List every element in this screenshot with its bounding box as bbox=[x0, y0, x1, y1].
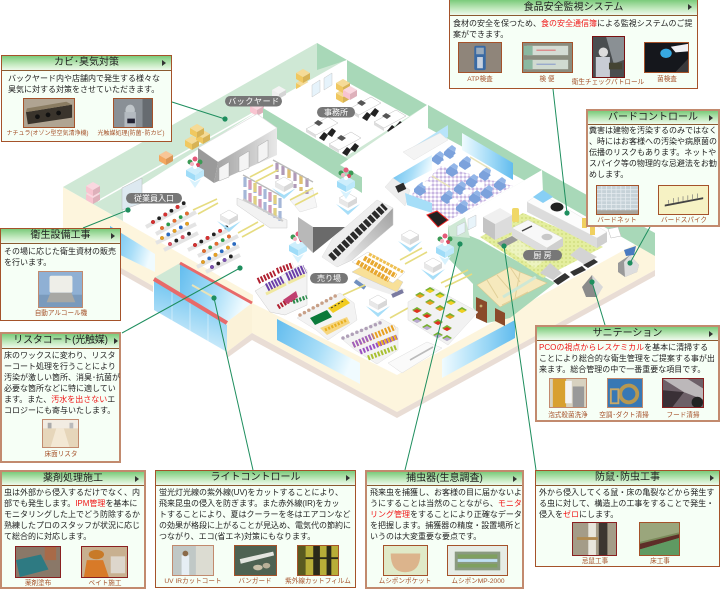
text block: ます。また、汚水を出さないエ bbox=[4, 395, 115, 404]
heading: 衛生設備工事 bbox=[30, 230, 90, 241]
room labels: 従業員入口 bbox=[134, 193, 174, 203]
room labels: 厨 房 bbox=[533, 251, 552, 260]
caption: バンガード bbox=[238, 578, 272, 585]
heading bbox=[156, 471, 355, 486]
text block bbox=[370, 488, 522, 541]
photo: stool test kits bbox=[522, 42, 573, 73]
heading bbox=[1, 229, 120, 244]
heading bbox=[2, 334, 119, 349]
text block bbox=[159, 488, 351, 541]
panel: insect trap survey bbox=[365, 470, 524, 589]
caption: ベイト施工 bbox=[89, 580, 121, 587]
kitchen island bbox=[512, 220, 563, 256]
text block: 外から侵入してくる鼠・床の亀裂などから発生す bbox=[539, 488, 714, 497]
caption: フード清掃 bbox=[667, 412, 699, 419]
checkout counter bbox=[388, 342, 442, 373]
heading: 防鼠･防虫工事 bbox=[595, 472, 660, 483]
text block: 飛来虫を捕獲し、お客様の目に届かないよ bbox=[370, 488, 522, 497]
text block bbox=[8, 74, 160, 94]
text block: 蛍光灯光線の紫外線(UV)をカットすることにより、 bbox=[159, 488, 343, 497]
text block: 来ます。総合管理の中で一番重要な項目です。 bbox=[539, 364, 705, 374]
photo: hood cleaning bbox=[662, 378, 704, 408]
caption: 泡式殺菌洗浄 bbox=[548, 412, 588, 419]
kitchen stoves bbox=[540, 247, 598, 285]
photo: restacoat floor bbox=[42, 419, 79, 448]
heading bbox=[367, 472, 522, 486]
heading bbox=[450, 0, 697, 16]
shelf group: produce crates bbox=[408, 287, 478, 345]
book shelves bbox=[237, 160, 318, 228]
photo: photocatalyst treatment bbox=[113, 98, 153, 128]
text block bbox=[539, 488, 714, 519]
panel: mold and odor control bbox=[1, 55, 172, 142]
photo: mushipon pocket bbox=[383, 545, 428, 576]
text block: を把握します。捕獲器の精度・設置場所と bbox=[370, 521, 521, 530]
elevator block bbox=[198, 114, 277, 183]
building shell: floor and outer walls bbox=[63, 43, 655, 418]
photo: bait application bbox=[81, 546, 128, 578]
backyard corridor: light green floor bbox=[63, 43, 347, 221]
photo: UV IR cut coat bbox=[172, 545, 214, 576]
panel: bird control bbox=[586, 109, 720, 227]
caption: 忌鼠工事 bbox=[582, 558, 608, 565]
heading: バードコントロール bbox=[608, 112, 698, 123]
dotted product shelves bbox=[146, 199, 264, 272]
photo: bacteria test bbox=[644, 42, 689, 73]
photo: automatic alcohol machine bbox=[38, 271, 83, 308]
room labels: バックヤード bbox=[228, 97, 280, 106]
heading: ライトコントロール bbox=[210, 472, 300, 483]
text block: 虫は外部から侵入するだけでなく、内 bbox=[4, 488, 140, 497]
text block: 侵入をゼロにします。 bbox=[539, 510, 618, 519]
caption: 紫外線カットフィルム bbox=[285, 578, 351, 585]
text block: 必要な箇所などに特に適してい bbox=[4, 384, 116, 393]
caption: 薬剤塗布 bbox=[25, 580, 51, 587]
photo: mushipon MP-2000 bbox=[447, 545, 508, 576]
wall: left cream wall with window bbox=[63, 187, 253, 305]
text block: その場に応じた衛生資材の販売 bbox=[4, 246, 116, 256]
text block: つながり、エコ(省エネ)対策にもなります。 bbox=[159, 532, 315, 541]
text block: 飛来昆虫の侵入を防ぎます。また赤外線(IR)をカッ bbox=[159, 499, 340, 508]
room labels: 事務所 bbox=[324, 107, 348, 117]
wall: right cream wall with window bbox=[397, 233, 655, 412]
caption: ムシポンMP-2000 bbox=[451, 578, 505, 585]
photo: floor work bbox=[639, 522, 680, 556]
text block: モニタリングした上でどう防除するか bbox=[4, 510, 140, 519]
shelf group: colorful flowers bbox=[343, 319, 398, 364]
text block bbox=[4, 351, 120, 415]
text block bbox=[589, 126, 717, 178]
wall: front cream wall with window bbox=[252, 303, 397, 412]
heading: 薬剤処理施工 bbox=[43, 473, 103, 484]
panel: light control bbox=[155, 470, 356, 588]
photo: UV cut film bbox=[297, 545, 339, 576]
panel: sanitary equipment bbox=[0, 228, 121, 321]
rooftop units and bird bbox=[582, 246, 639, 297]
caption: 自動アルコール機 bbox=[35, 310, 87, 317]
text block: 案ができます。 bbox=[453, 30, 508, 38]
text block: PCOの視点からレスケミカルを基本に清掃する bbox=[539, 342, 708, 352]
connector lines and dots bbox=[83, 89, 650, 470]
text block: る虫に対して、構造上の工事をすることで発生・ bbox=[539, 499, 714, 508]
heading: リスタコート(光触媒) bbox=[13, 335, 108, 346]
panel: food safety monitoring bbox=[449, 0, 698, 89]
text block: 食材の安全を保つため、食の安全通信簿による監視システムのご提 bbox=[453, 18, 693, 28]
photo: bird spike bbox=[658, 185, 709, 215]
heading bbox=[536, 471, 719, 486]
shelf group: large yellow rack bbox=[352, 252, 405, 296]
heading: 捕虫器(生息調査) bbox=[406, 473, 483, 484]
text block: 糞害は建物を汚染するのみではなく bbox=[589, 126, 717, 134]
text block: て総合的に対応します。 bbox=[4, 532, 91, 541]
heading: カビ･臭気対策 bbox=[54, 57, 119, 68]
panel: sanitation bbox=[535, 325, 720, 422]
heading bbox=[2, 472, 144, 486]
kitchen wall counter bbox=[527, 193, 607, 248]
panel: Restacoat photocatalyst bbox=[0, 332, 121, 463]
room labels: 売り場 bbox=[317, 273, 341, 283]
caption: バードネット bbox=[597, 217, 637, 224]
photo: foam sterilizing wash bbox=[549, 378, 587, 408]
text block: 、時にはお客様への汚染や病原菌の bbox=[589, 136, 717, 146]
text block: いうのは大変重要な要点です。 bbox=[370, 532, 481, 541]
text block: トすることにより、夏はクーラーを冬はエアコンなど bbox=[159, 510, 351, 519]
text block: 熟練したプロのスタッフが状況に応じ bbox=[4, 521, 140, 530]
panel: rodent and insect proofing bbox=[535, 470, 720, 567]
text block: 汚染が激しい箇所、消臭･抗菌が bbox=[4, 373, 120, 382]
text block: リング管理をすることにより正確なデータ bbox=[370, 510, 522, 519]
text block: スパイク等の物理的な忌避法をお勧 bbox=[589, 158, 717, 168]
photo: air duct cleaning bbox=[607, 378, 643, 408]
text block: ことにより総合的な衛生管理をご提案する事が出 bbox=[539, 354, 715, 362]
text block: うにすることは当然のことながら、モニタ bbox=[370, 499, 522, 508]
text block bbox=[4, 488, 140, 541]
panel: chemical treatment bbox=[0, 470, 146, 589]
heading: サニテーション bbox=[593, 328, 662, 339]
text block: を行います。 bbox=[4, 258, 51, 266]
heading: 食品安全監視システム bbox=[524, 2, 623, 13]
heading bbox=[588, 111, 718, 125]
caption: 床工事 bbox=[650, 558, 670, 565]
caption: 衛生チェックパトロール bbox=[572, 79, 644, 86]
photo: ATP meter bbox=[458, 42, 502, 73]
photo: chemical spraying bbox=[15, 546, 61, 578]
caption: 床面リスタ bbox=[45, 451, 77, 458]
text block: バックヤード内や店舗内で発生する様々な bbox=[8, 74, 160, 82]
caption: UV IRカットコート bbox=[164, 578, 222, 585]
entrance: glass storefront with red bands bbox=[154, 263, 252, 358]
text block: の効果が格段に上がることが見込め、電気代の節約に bbox=[159, 521, 351, 530]
caption: 光触媒処理(防菌･防カビ) bbox=[98, 131, 164, 137]
photo: ozone air purifier bbox=[23, 98, 75, 128]
caption: ナチュラ(オゾン型空気清浄機) bbox=[6, 131, 88, 137]
text block bbox=[4, 246, 116, 266]
text block bbox=[453, 18, 693, 38]
heading bbox=[537, 327, 718, 341]
text block: 伝播のリスクもあります。ネットや bbox=[589, 148, 716, 156]
heading bbox=[2, 56, 171, 71]
text block: めします。 bbox=[589, 170, 628, 178]
photo: van guard tube bbox=[234, 545, 277, 576]
text block: ーコート処理を行うことにより bbox=[4, 362, 116, 371]
room: lounge with blue chairs bbox=[340, 105, 543, 233]
caption: バードスパイク bbox=[661, 217, 707, 224]
shelf group: packaged goods bbox=[297, 293, 357, 340]
caption: 菌検査 bbox=[657, 76, 677, 83]
food and produce shelves bbox=[297, 248, 478, 373]
room: kitchen bbox=[448, 170, 655, 326]
room: office bbox=[263, 60, 428, 193]
kitchen fridge bbox=[483, 208, 512, 240]
room labels bbox=[126, 96, 562, 284]
red and purple merchandise racks bbox=[255, 265, 307, 315]
text block: 臭気に対する対策をさせていただきます。 bbox=[8, 84, 159, 94]
text block: コロジーにも寄与いたします。 bbox=[4, 406, 115, 415]
text block bbox=[539, 342, 715, 374]
photo: hygiene check patrol bbox=[592, 36, 625, 78]
photo: bird net bbox=[596, 185, 639, 215]
text block: 部でも発生します。IPM管理を基本に bbox=[4, 499, 137, 508]
escalator bbox=[298, 200, 393, 267]
caption: 空調･ダクト清掃 bbox=[599, 412, 649, 419]
caption: ムシポンポケット bbox=[379, 578, 431, 585]
display tables and flower stands bbox=[186, 156, 454, 317]
caption: ATP検査 bbox=[467, 76, 493, 83]
photo: rodent proofing work bbox=[572, 522, 617, 556]
storage room with cream shelves bbox=[477, 267, 547, 307]
text block: 床のワックスに変わり、リスタ bbox=[4, 351, 115, 360]
caption: 検 便 bbox=[539, 76, 555, 83]
